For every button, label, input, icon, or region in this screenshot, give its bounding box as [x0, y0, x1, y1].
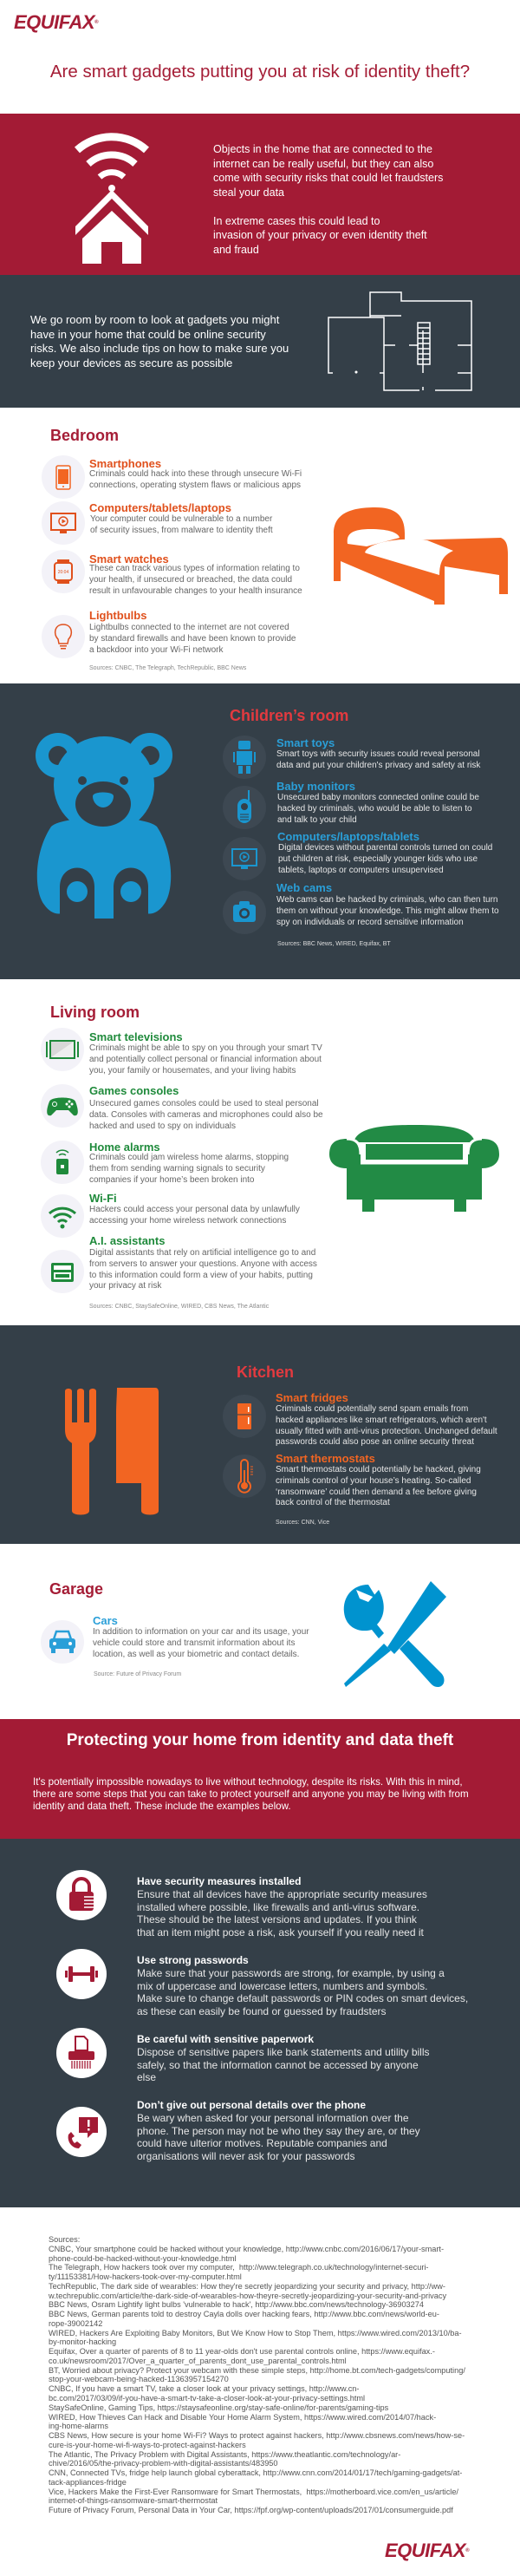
item: computers children: put children at risk, especially younger kids who use	[278, 854, 478, 864]
item: web cams: them on without your knowledge. This might allow them to	[276, 906, 499, 916]
item: computers children: Digital devices without parental controls turned on could	[278, 843, 492, 853]
item: web cams: Web cams can be hacked by criminals, who can then turn	[276, 895, 497, 905]
item: ai assistants: to this information could form a view of your habits, putting	[89, 1271, 313, 1280]
text: sources list: BT, Worried about privacy? Protect your webcam with these simple steps, http://home.bt.com/tech-gadgets/computing/	[49, 2366, 465, 2375]
text: intro: invasion of your privacy or even identity theft	[213, 229, 427, 241]
icon: dumbbell	[56, 1949, 107, 1999]
text: sources list: CBS News, How secure is your home Wi-Fi? Ways to protect against hackers, http://www.cbsnews.com/news/how-se-	[49, 2431, 465, 2440]
item: smart watches: These can track various types of information relating to	[89, 564, 300, 573]
text: sources list: TechRepublic, The dark side of wearables: How they're secretly jeopardizing your security and privacy, http://ww-	[49, 2282, 445, 2291]
text: sources list: CNBC, Your smartphone could be hacked without your knowledge, http://www.cnbc.com/2016/06/17/your-smart-	[49, 2245, 444, 2253]
panel: tips	[0, 1839, 520, 2207]
tip: security measures: Have security measures installed	[137, 1875, 301, 1887]
item: smart watches	[42, 550, 302, 596]
tip: security measures: installed where possible, like firewalls and anti-virus software.	[137, 1901, 419, 1913]
item: ai assistants: from servers to answer your questions. Anyone with access	[89, 1259, 317, 1269]
item: home alarms: Home alarms	[89, 1141, 160, 1154]
tip: paperwork	[56, 2028, 430, 2083]
text: intro	[213, 143, 443, 255]
tip: phone: could have ulterior motives. Reputable companies and	[137, 2137, 387, 2149]
text: room by room: We go room by room to look at gadgets you might	[30, 313, 279, 326]
text: intro: internet can be really useful, but they can also	[213, 158, 433, 170]
item: smart tv: Criminals might be able to spy on you through your smart TV	[89, 1043, 322, 1053]
tip: phone: Be wary when asked for your personal information over the	[137, 2112, 409, 2124]
item: smart thermostats: Smart thermostats could potentially be hacked, giving	[276, 1465, 481, 1474]
panel: children's room	[0, 683, 520, 979]
text: sources list: Sources:	[49, 2235, 80, 2244]
item: lightbulbs	[42, 609, 296, 658]
text: sources list: StaySafeOnline, Gaming Tips, https://staysafeonline.org/stay-safe-online/for-parents/gaming-tips	[49, 2403, 388, 2412]
panel: living room	[0, 979, 520, 1325]
item: wi-fi	[41, 1192, 300, 1238]
text: sources list: ing-home-alarms	[49, 2422, 108, 2430]
sources: bedroom: Sources: CNBC, The Telegraph, TechRepublic, BBC News	[89, 665, 246, 671]
item: smart fridges: hacked appliances like smart refrigerators, which aren't	[276, 1415, 487, 1425]
text: sources list	[49, 2235, 465, 2514]
item: lightbulbs: a backdoor into your Wi-Fi network	[89, 645, 224, 655]
text: sources list: Equifax, Over a quarter of parents of 8 to 11 year-olds don't use parental controls online, https://www.equifax.-	[49, 2347, 435, 2356]
icon: car	[41, 1620, 84, 1664]
sources: garage: Source: Future of Privacy Forum	[94, 1671, 181, 1677]
heading: garage: Garage	[49, 1580, 103, 1598]
tip: security measures	[56, 1870, 427, 1939]
tip: phone: Don’t give out personal details over the phone	[137, 2099, 366, 2111]
text: sources list: Vice, Hackers Make the First-Ever Ransomware for Smart Thermostats, https://motherboard.vice.com/en_us/article/	[49, 2488, 458, 2496]
icon: alarm	[41, 1141, 84, 1184]
text: sources list: The Telegraph, How hackers took over my computer, http://www.telegraph.co.uk/technology/internet-securi-	[49, 2263, 428, 2272]
text: sources list: rope-39002142	[49, 2319, 102, 2328]
text: intro: Objects in the home that are connected to the	[213, 143, 432, 155]
item: web cams	[223, 881, 499, 934]
icon: wifi and house	[75, 133, 149, 264]
icon: camera	[223, 891, 266, 934]
tip: paperwork: else	[137, 2071, 156, 2083]
panel: kitchen: back control of the thermostat	[276, 1498, 390, 1507]
text: sources list: WIRED, Hackers Are Exploiting Baby Monitors, But We Know How to Stop Them, https://www.wired.com/2013/10/ba-	[49, 2329, 462, 2337]
icon: bed	[333, 507, 508, 605]
icon: watch: 20:04	[58, 570, 68, 575]
item: ai assistants: your privacy at risk	[89, 1281, 161, 1291]
tip: paperwork: safely, so that the information cannot be accessed by anyone	[137, 2059, 419, 2071]
text: sources list: stop-your-webcam-being-hacked-11363957154270	[49, 2375, 229, 2383]
item: wi-fi: accessing your home wireless network connections	[89, 1216, 286, 1226]
item: wi-fi: Wi-Fi	[89, 1192, 117, 1205]
text: intro: In extreme cases this could lead to	[213, 215, 380, 227]
text: sources list: bc.com/2017/03/09/if-you-have-a-smart-tv-take-a-closer-look-at-your-privacy-settings.html	[49, 2394, 365, 2403]
item: smart thermostats	[223, 1452, 481, 1507]
heading: children's room: Children’s room	[230, 707, 348, 724]
text: sources list: tack-appliances-fridge	[49, 2478, 127, 2487]
icon: bulb	[42, 615, 85, 658]
text: intro: steal your data	[213, 186, 284, 198]
tip: strong passwords: Make sure that your passwords are strong, for example, by using a	[137, 1967, 445, 1979]
item: cars: In addition to information on your car and its usage, your	[93, 1627, 309, 1637]
item: smart fridges	[223, 1391, 497, 1447]
panel: living room: A.I. assistants	[89, 1234, 165, 1247]
logo: top: EQUIFAX®	[14, 11, 98, 33]
heading: kitchen: Kitchen	[237, 1363, 294, 1381]
heading: protecting: Protecting your home from identity and data theft	[67, 1731, 453, 1749]
sources: children: Sources: BBC News, WIRED, Equifax, BT	[277, 941, 391, 947]
item: smart tv: you, your family or housemates, and your living habits	[89, 1066, 296, 1076]
item: baby monitors	[223, 780, 479, 829]
item: smart tv	[41, 1028, 322, 1076]
item: cars: Cars	[93, 1614, 118, 1627]
heading: bedroom: Bedroom	[50, 427, 119, 444]
icon: floor plan	[328, 291, 472, 391]
text: sources list: BBC News, German parents told to destroy Cayla dolls over hacking fears, http://www.bbc.com/news/world-eu-	[49, 2310, 439, 2318]
item: smart thermostats: Smart thermostats	[276, 1452, 375, 1465]
item: home alarms: companies if your home’s been broken into	[89, 1175, 254, 1185]
text: room by room: keep your devices as secure as possible	[30, 356, 232, 369]
item: lightbulbs: by standard firewalls and have been known to provide	[89, 634, 296, 644]
icon: teddy bear	[36, 733, 172, 919]
item: cars	[41, 1614, 309, 1664]
tip: strong passwords	[56, 1949, 468, 2017]
panel: room by room	[0, 275, 520, 408]
item: smartphones: Criminals could hack into these through unsecure Wi-Fi	[89, 469, 302, 479]
item: smartphones: Smartphones	[89, 457, 161, 470]
text: sources list: The Atlantic, The Privacy Problem with Digital Assistants, https://www.theatlantic.com/technology/ar-	[49, 2450, 400, 2459]
item: games consoles: data. Consoles with cameras and microphones could also be	[89, 1110, 323, 1120]
logo: bottom: EQUIFAX®	[385, 2540, 469, 2561]
item: home alarms: Criminals could jam wireless home alarms, stopping	[89, 1153, 289, 1162]
tip: paperwork: Be careful with sensitive paperwork	[137, 2033, 314, 2045]
item: baby monitors: Baby monitors	[276, 780, 355, 793]
tip: phone	[56, 2099, 420, 2162]
icon: gamepad	[41, 1084, 84, 1128]
item: smart watches: your health, if unsecured or breached, the data could	[89, 575, 292, 585]
text: sources list: CNBC, If you have a smart TV, take a closer look at your privacy settings, http://www.cn-	[49, 2384, 359, 2393]
icon: monitor	[223, 837, 266, 880]
item: computers children	[223, 830, 492, 880]
item: smart tv: and potentially collect personal or financial information about	[89, 1055, 322, 1064]
text: sources list: phone-could-be-hacked-without-your-knowledge.html	[49, 2254, 237, 2263]
tip: paperwork: Dispose of sensitive papers like bank statements and utility bills	[137, 2046, 430, 2058]
item: games consoles	[41, 1084, 323, 1131]
panel: intro red	[0, 114, 520, 275]
text: sources list: co.uk/newsroom/2017/Over_a_quarter_of_parents_dont_use_parental_controls.html	[49, 2357, 347, 2365]
item: games consoles: Unsecured games consoles could be used to steal personal	[89, 1099, 319, 1108]
item: games consoles: Games consoles	[89, 1084, 179, 1097]
item: smart toys	[223, 736, 480, 779]
item: ai assistants: Digital assistants that rely on artificial intelligence go to and	[89, 1248, 315, 1258]
item: smart fridges: Criminals could potentially send spam emails from	[276, 1404, 468, 1414]
icon: tv	[41, 1028, 84, 1071]
text: sources list: cure-is-your-home-wi-fi-ways-to-protect-against-hackers	[49, 2441, 246, 2449]
panel: tips: that an item might pose a risk, ask yourself if you really need it	[137, 1926, 424, 1939]
panel: children's room: Web cams	[276, 881, 332, 894]
title: Are smart gadgets putting you at risk of identity theft?	[50, 62, 470, 82]
text: room by room: risks. We also include tips on how to make sure you	[30, 342, 289, 355]
item: smart fridges: Smart fridges	[276, 1391, 348, 1404]
panel: garage	[0, 1544, 520, 1719]
text: protecting intro: there are some steps that you can take to protect yourself and anyone you may be living with from	[33, 1788, 469, 1800]
item: computers: of security issues, from malware to identity theft	[90, 526, 273, 535]
item: lightbulbs: Lightbulbs connected to the internet are not covered	[89, 623, 289, 632]
text: sources list: CNN, Connected TVs, fridge help launch global cyberattack, http://www.cnn.com/2014/01/17/tech/gaming-gadgets/at-	[49, 2468, 462, 2477]
text: sources list: chive/2016/05/the-privacy-problem-with-digital-assistants/483950	[49, 2459, 278, 2468]
icon: shredder	[56, 2028, 107, 2078]
item: smart toys: data and put your children's privacy and safety at risk	[276, 761, 480, 770]
text: sources list: w.techrepublic.com/article/the-dark-side-of-wearables-how-theyre-secretly-jeopardizing-your-security-and-privacy	[49, 2292, 446, 2300]
icon: sofa	[329, 1125, 499, 1212]
tip: security measures: These should be the latest versions and updates. If you think	[137, 1913, 417, 1925]
tip: phone: phone. The person may not be who they say they are, or they	[137, 2125, 420, 2137]
item: lightbulbs: Lightbulbs	[89, 609, 146, 622]
tip: security measures: Ensure that all devices have the appropriate security measures	[137, 1888, 427, 1900]
text: room by room	[30, 313, 289, 369]
item: cars: location, as well as your biometric and contact details.	[93, 1650, 299, 1659]
panel: tips: as these can easily be found or guessed by fraudsters	[137, 2005, 387, 2017]
text: sources list: Future of Privacy Forum, Personal Data in Your Car, https://fpf.org/wp-content/uploads/2017/01/consumerguide.pdf	[49, 2506, 453, 2514]
item: smartphones: connections, operating stystem flaws or malicious apps	[89, 481, 301, 490]
item: baby monitors: Unsecured baby monitors connected online could be	[277, 793, 479, 802]
sources: living room: Sources: CNBC, StaySafeOnline, WIRED, CBS News, The Atlantic	[89, 1304, 269, 1310]
icon: fridge	[223, 1395, 266, 1438]
item: computers	[42, 501, 273, 545]
item: smart fridges: usually fitted with anti-virus protection. Unchanged default	[276, 1427, 497, 1436]
icon: assistant	[41, 1250, 84, 1293]
tip: strong passwords: mix of uppercase and lowercase letters, numbers and symbols.	[137, 1980, 428, 1992]
panel: kitchen: passwords could also pose an online security threat	[276, 1437, 474, 1447]
icon: robot	[223, 736, 266, 779]
item: baby monitors: hacked by criminals, who would be able to listen to	[277, 804, 472, 814]
item: ai assistants	[41, 1234, 317, 1293]
text: protecting intro: It's potentially impossible nowadays to live without technology, despite its risks. With this in mind,	[33, 1776, 463, 1788]
icon: monitor	[42, 501, 85, 545]
item: smart tv: Smart televisions	[89, 1030, 183, 1043]
text: sources list: internet-of-things-ransomware-smart-thermostat	[49, 2496, 218, 2505]
item: computers children: tablets, laptops or computers unsupervised	[278, 866, 444, 875]
icon: thermometer	[223, 1455, 266, 1498]
item: cars: vehicle could store and transmit information about its	[93, 1638, 295, 1648]
heading: living room: Living room	[50, 1004, 140, 1021]
text: sources list: by-monitor-hacking	[49, 2337, 116, 2346]
panel: children's room: Computers/laptops/tablets	[277, 830, 419, 843]
icon: tools	[343, 1581, 446, 1687]
item: home alarms: them from sending warning signals to security	[89, 1164, 265, 1174]
panel: bedroom	[0, 408, 520, 683]
icon: fork and knife	[65, 1388, 159, 1514]
text: sources list: WIRED, How Thieves Can Hack and Disable Your Home Alarm System, https://www.wired.com/2014/07/hack-	[49, 2413, 436, 2422]
text: protecting intro: identity and data theft. These include the examples below.	[33, 1801, 291, 1812]
panel: protecting	[0, 1719, 520, 1839]
item: smart toys: Smart toys	[276, 736, 335, 749]
text: room by room: have in your home that could be online security	[30, 328, 266, 340]
text: protecting intro	[33, 1776, 469, 1812]
item: smart toys: Smart toys with security issues could reveal personal	[276, 749, 480, 759]
sources: kitchen: Sources: CNN, Vice	[276, 1520, 329, 1526]
text: sources list: ty/11153381/How-hackers-took-over-my-computer.html	[49, 2272, 242, 2281]
item: web cams: spy on individuals or record sensitive information	[276, 918, 464, 927]
tip: strong passwords: Make sure to change default passwords or PIN codes on smart devices,	[137, 1992, 468, 2004]
item: smart watches: result in unfavourable changes to your health insurance	[89, 586, 302, 596]
item: smart watches: Smart watches	[89, 552, 169, 566]
icon: baby monitor	[223, 786, 266, 829]
item: wi-fi: Hackers could access your personal data by unlawfully	[89, 1205, 300, 1214]
item: computers: Your computer could be vulnerable to a number	[90, 514, 272, 524]
item: smart thermostats: ‘ransomware’ could then demand a fee before giving	[276, 1487, 477, 1497]
item: smart thermostats: criminals control of your house’s heating. So-called	[276, 1476, 471, 1486]
text: sources list: BBC News, Osram Lightify light bulbs 'vulnerable to hack', http://www.bbc.com/news/technology-36903274	[49, 2300, 424, 2309]
icon: padlock	[56, 1870, 107, 1920]
icon: phone	[42, 455, 85, 499]
icon: wifi	[41, 1194, 84, 1238]
icon: watch	[42, 550, 85, 593]
text: intro: come with security risks that could let fraudsters	[213, 172, 443, 184]
item: smartphones	[42, 455, 302, 499]
item: home alarms	[41, 1141, 289, 1185]
icon: phone alert	[56, 2107, 107, 2157]
tip: phone: organisations will never ask for your passwords	[137, 2150, 354, 2162]
item: games consoles: hacked and used to spy on individuals	[89, 1121, 236, 1131]
text: intro: and fraud	[213, 243, 259, 255]
item: baby monitors: and talk to your child	[277, 815, 357, 825]
item: computers: Computers/tablets/laptops	[89, 501, 231, 514]
tip: strong passwords: Use strong passwords	[137, 1954, 249, 1966]
panel: kitchen	[0, 1325, 520, 1544]
